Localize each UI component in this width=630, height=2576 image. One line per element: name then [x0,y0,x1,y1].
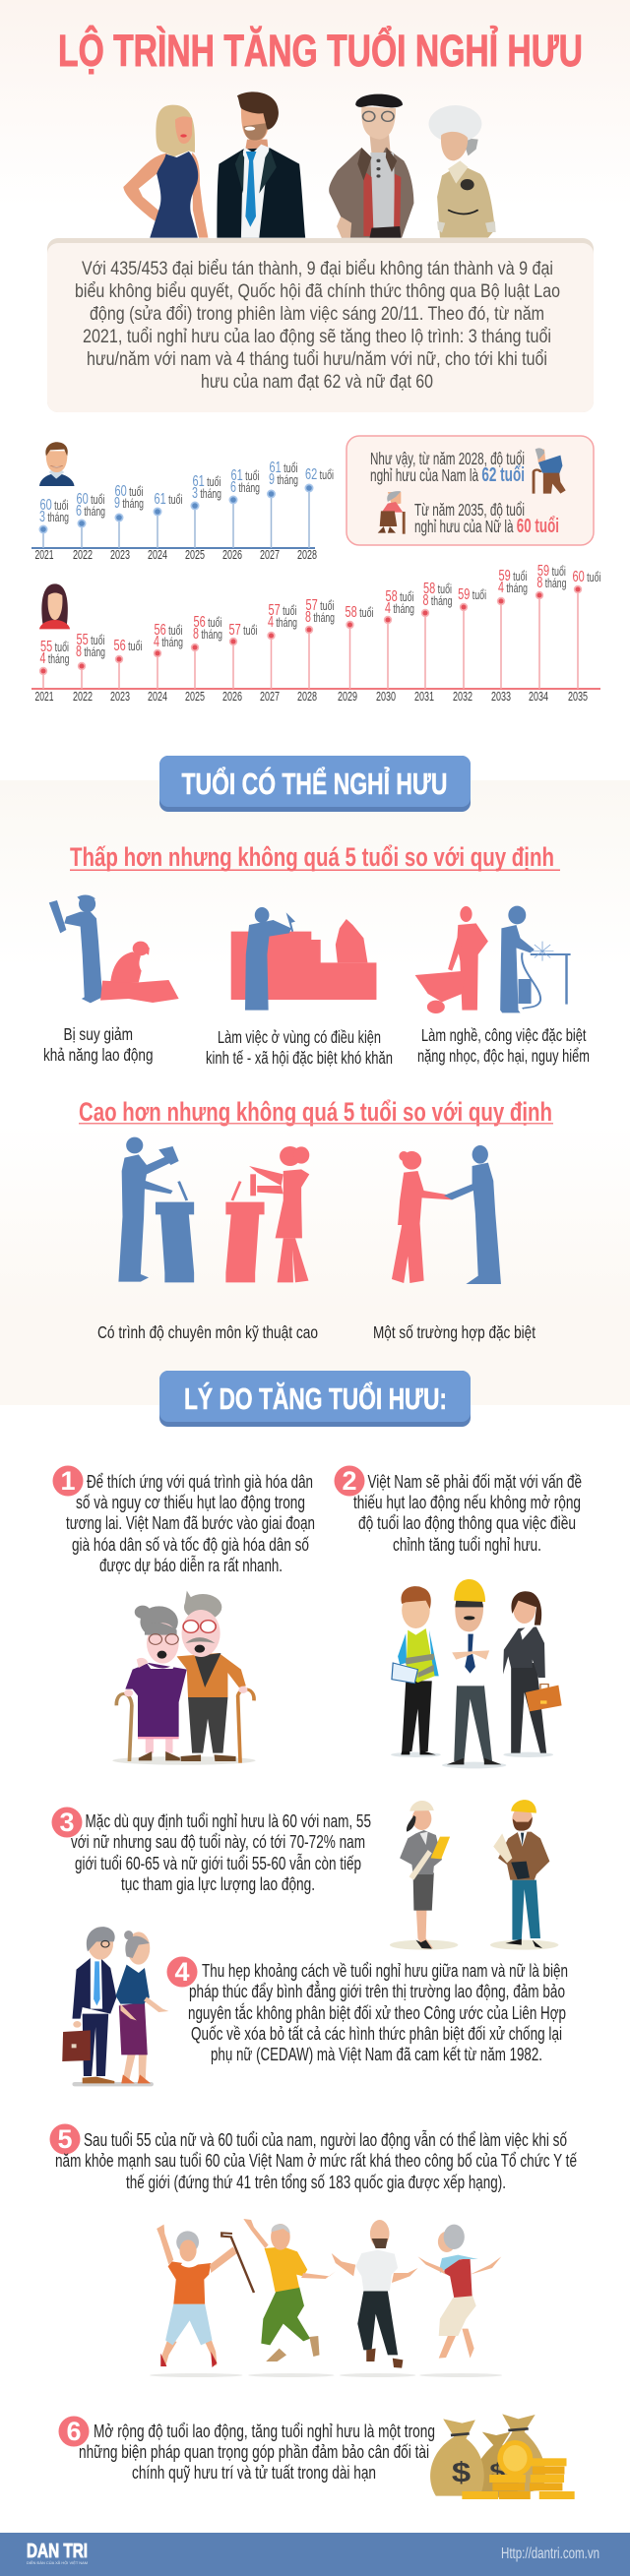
intro text [75,258,560,393]
illustration: dancing seniors [150,2219,502,2377]
badge 6: 6 [66,2417,82,2446]
icon: injured worker [49,895,179,1003]
footer [0,2533,630,2576]
callout text: women [414,500,559,537]
heading: retirement age pill [159,756,471,812]
figure: man in yellow shirt [243,2219,336,2361]
year labels: 2032 [453,690,472,704]
badge 2: 2 [342,1466,357,1496]
illustration: three workers [391,1579,562,1768]
money bags: $ [452,2457,472,2488]
reason 5 [49,2123,578,2192]
age labels: 59 tuổi [537,563,566,580]
age labels: 57 tuổi [228,622,258,639]
milestones [39,585,582,689]
year labels: 2023 [110,548,130,562]
age labels [39,563,600,667]
panel: introduction [47,238,594,412]
year labels: 2024 [148,548,167,562]
year labels [35,548,317,562]
year labels: 2027 [260,548,280,562]
reason 6 [59,2417,435,2483]
reason 3 text: giới tuổi 60-65 và nữ giới tuổi 55-60 vẫn còn tiếp [75,1853,361,1873]
badge 3: 3 [59,1808,75,1837]
age labels: 55 tuổi [40,639,69,655]
badge 4: 4 [174,1957,190,1987]
captions: lower age cases: kinh tế - xã hội đặc biệt khó khăn [206,1048,393,1068]
reason 2 [335,1466,582,1555]
illustrations: higher age cases [118,1137,501,1284]
age labels: 57 tuổi [305,597,335,614]
reason 5 text [55,2129,578,2192]
callout text: women: Từ năm 2035, độ tuổi [414,500,525,520]
age labels: 6 tháng [230,479,260,496]
age labels: 56 tuổi [154,622,183,639]
age labels: 4 tháng [385,600,414,617]
intro text: hưu của nam đạt 62 và nữ đạt 60 [201,371,433,393]
callout: summary [346,436,594,545]
age labels: 8 tháng [423,592,453,609]
year labels: 2021 [35,690,54,704]
heading: reasons pill: LÝ DO TĂNG TUỔI HƯU: [184,1380,447,1416]
age labels: 60 tuổi [114,483,144,500]
year labels: 2028 [297,690,317,704]
badge 1 [53,1466,83,1496]
figure: grandma [124,1606,247,1760]
year labels: 2023 [110,690,130,704]
age labels: 55 tuổi [77,632,104,648]
age labels: 58 tuổi [423,581,452,597]
logo [27,2541,88,2565]
callout text: men [370,449,525,486]
badge 5 [49,2123,81,2155]
callout text: men: nghỉ hưu của Nam là 62 tuổi [370,464,525,486]
year labels: 2021 [35,548,54,562]
intro text: động (sửa đổi) trong phiên làm việc sáng 20/11. Theo đó, từ năm [90,303,544,325]
heading: reasons pill [159,1371,471,1427]
reason 1 text [66,1471,315,1575]
badge 6 [59,2417,89,2446]
reason 1 text: số và nguy cơ thiếu hụt lao động trong [76,1492,305,1512]
age labels: 4 tháng [498,580,528,596]
age labels: 4 tháng [268,614,297,631]
age labels: 61 tuổi [270,460,297,476]
figure: woman with purple skirt [116,1931,168,2083]
icon: old man walking [534,448,566,494]
captions: lower age cases: Làm việc ở vùng có điều kiện [218,1027,381,1047]
icon: man avatar [39,442,75,486]
illustration: two architects [390,1800,558,1950]
captions: higher age cases: Một số trường hợp đặc biệt [373,1322,536,1342]
age labels: 59 tuổi [498,568,528,584]
year labels: 2033 [491,690,511,704]
age labels: 56 tuổi [114,638,142,654]
age labels: 6 tháng [76,503,105,520]
reason 3 text: với nữ nhưng sau độ tuổi này, có tới 70-72% nam [71,1831,365,1852]
age labels: 8 tháng [193,626,222,643]
icon: handshake [392,1145,501,1284]
reason 4 text [188,1960,568,2064]
year labels: 2035 [568,690,588,704]
year labels: 2022 [73,548,93,562]
icon: heavy and hazardous work [415,906,571,1013]
heading: retirement age pill: TUỔI CÓ THỂ NGHỈ HƯU [181,766,447,801]
figure: worker in vest [392,1586,439,1754]
age labels: 57 tuổi [268,602,297,619]
illustration: older office couple [62,1927,168,2086]
year labels: 2027 [260,690,280,704]
year labels: 2028 [297,548,317,562]
captions: higher age cases [97,1322,536,1342]
money bags [430,2414,545,2497]
illustration: elderly couple [112,1591,256,1765]
illustration: money bags and coins [430,2414,575,2499]
logo: DIỄN ĐÀN CỦA XÃ HỘI VIỆT NAM [27,2560,88,2565]
figure: businesswoman [503,1591,562,1753]
age labels: 60 tuổi [39,497,69,514]
year labels: 2029 [338,690,357,704]
reason 6 text: chính quỹ hưu trí và tử tuất trong dài hạn [132,2462,376,2483]
age labels: 58 tuổi [386,588,413,605]
age labels: 9 tháng [114,495,144,512]
year labels: 2034 [529,690,548,704]
age labels: 4 tháng [39,650,70,667]
age labels: 59 tuổi [458,586,486,603]
axis [32,547,315,549]
age labels: 60 tuổi [77,491,104,508]
year labels: 2026 [222,690,242,704]
money bags: $ [489,2459,506,2484]
reason 4 [167,1956,568,2064]
reason 1 text: già hóa dân số và tốc độ già hóa dân số [72,1534,309,1555]
icon: old woman walking [378,491,404,534]
axis [32,688,600,690]
milestones [39,484,313,548]
illustration: four people [123,92,496,238]
age labels: 4 tháng [154,634,183,650]
captions: higher age cases: Có trình độ chuyên môn kỹ thuật cao [97,1322,318,1342]
age labels: 9 tháng [269,471,298,488]
year labels: 2030 [376,690,396,704]
reason 3 [51,1807,371,1894]
reason 6 text [79,2421,435,2483]
callout text: women: nghỉ hưu của Nữ là 60 tuổi [414,516,559,537]
age labels: 60 tuổi [573,569,600,585]
year labels: 2031 [414,690,434,704]
figure: woman with cane [157,2225,254,2367]
captions: lower age cases: Bị suy giảm [63,1024,133,1044]
year labels: 2022 [73,690,93,704]
figure: young woman [123,105,208,238]
reason 3 text: Mặc dù quy định tuổi nghỉ hưu là 60 với nam, 55 [85,1810,371,1831]
badge 5: 5 [57,2124,73,2154]
figure: bearded man [332,2220,417,2368]
badge 3 [51,1807,83,1838]
reason 1 text: được dự báo diễn ra rất nhanh. [99,1555,283,1575]
figure: male architect [490,1800,558,1950]
reason 1 [53,1466,315,1575]
year labels: 2025 [185,690,205,704]
age labels [39,460,334,525]
captions: lower age cases: khả năng lao động [43,1045,154,1065]
reason 3 text: tục tham gia lực lượng lao động. [121,1873,315,1894]
age labels: 8 tháng [536,575,566,591]
reason 1 text: Để thích ứng với quá trình già hóa dân [87,1471,313,1492]
badge 2 [335,1466,364,1496]
figure: man in suit [217,92,305,238]
reason 6 text: những biện pháp quan trọng góp phần đảm bảo cân đối tài [79,2441,429,2462]
icon: speakers at podiums [118,1137,309,1282]
age labels: 56 tuổi [193,614,222,631]
illustrations: lower age cases [49,895,571,1013]
figure: female architect [390,1801,458,1950]
callout text: men: Như vậy, từ năm 2028, độ tuổi [370,449,525,468]
captions: lower age cases [43,1024,590,1068]
year labels: 2024 [148,690,167,704]
age labels: 62 tuổi [305,466,334,483]
reason 1 text: tương lai. Việt Nam đã bước vào giai đoạn [66,1512,315,1533]
age labels: 58 tuổi [345,604,374,621]
icon: builder in difficult region [231,907,376,1011]
reason 2 text: chỉnh tăng tuổi nghỉ hưu. [393,1534,541,1555]
logo: DAN TRI [27,2541,88,2562]
figure: old man with cap [329,94,413,238]
badge 1: 1 [60,1466,76,1496]
year labels [35,690,588,704]
reason 2 text [353,1471,582,1555]
icon: woman avatar [39,583,70,629]
figure: woman with scarf [417,2225,501,2359]
year labels: 2025 [185,548,205,562]
badge 4 [167,1956,197,1988]
age labels: 3 tháng [192,485,221,502]
figure: grandpa [177,1591,246,1761]
age labels: 61 tuổi [193,473,220,490]
coins [462,2440,575,2499]
figure: man with briefcase [62,1927,116,2083]
age labels: 61 tuổi [230,467,260,484]
age labels: 3 tháng [39,509,69,525]
figure: engineer with helmet [447,1579,501,1764]
reason 3 text [71,1810,371,1894]
chart: women retirement age timeline [32,563,600,704]
age labels: 8 tháng [76,644,105,660]
year labels: 2026 [222,548,242,562]
chart: men retirement age timeline [32,460,334,562]
figure: old woman [429,105,496,238]
age labels: 61 tuổi [154,491,183,508]
reason 6 text: Mở rộng độ tuổi lao động, tăng tuổi nghỉ hưu là một trong [94,2421,435,2441]
age labels: 8 tháng [305,609,335,626]
